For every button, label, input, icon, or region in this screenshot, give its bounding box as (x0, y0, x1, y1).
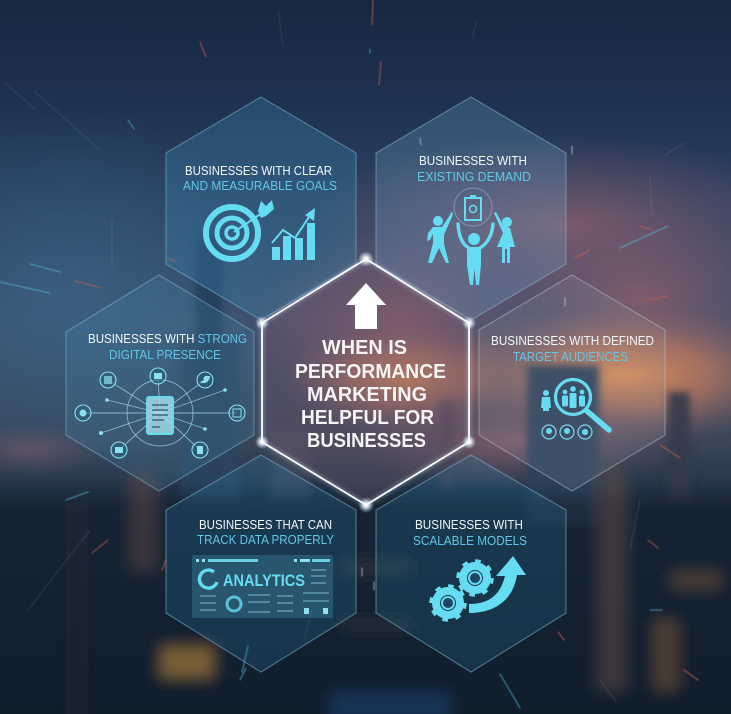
label: track data properly (197, 518, 335, 547)
icon: white up arrow (346, 283, 386, 329)
panel: existing demand (376, 97, 566, 320)
label: existing demand: EXISTING DEMAND (417, 170, 531, 184)
icon: audience circles (542, 425, 592, 439)
icon: tablet (147, 397, 173, 434)
icon: target with arrow (206, 200, 274, 259)
title: HELPFUL FOR (301, 407, 435, 429)
label: scalable models: SCALABLE MODELS (413, 534, 527, 548)
icon: social nodes (75, 368, 245, 458)
label: strong digital presence (88, 332, 247, 362)
icon: person outside magnifier (541, 390, 551, 411)
icon: connected network lines (83, 376, 237, 450)
chart: analytics dashboard (192, 555, 333, 618)
panel: track data properly (166, 455, 356, 672)
label: strong digital presence: DIGITAL PRESENCE (109, 348, 221, 362)
dashboard title: ANALYTICS (223, 571, 305, 590)
label: existing demand: BUSINESSES WITH (419, 154, 527, 168)
label: clear and measurable goals (183, 164, 337, 193)
title (295, 337, 446, 452)
icon: center person arms raised (458, 224, 493, 285)
glowing vertices (255, 251, 476, 513)
label: strong digital presence: BUSINESSES WITH STRONG (88, 332, 247, 346)
title: MARKETING (307, 384, 427, 406)
panel: scalable models (376, 455, 566, 672)
icon: upper gear (458, 562, 492, 594)
icon: left person cheering (427, 212, 453, 263)
icon: lower gear (432, 586, 464, 620)
icon: clipboard in circle (454, 188, 492, 226)
icon: rising bar chart (272, 208, 315, 260)
icon: social node glyphs (80, 373, 241, 454)
title: PERFORMANCE (295, 361, 446, 383)
lower city blocks (0, 470, 731, 714)
panel: clear and measurable goals (166, 97, 356, 320)
label: clear and measurable goals: BUSINESSES WITH CLEAR (185, 164, 332, 178)
label: scalable models (413, 518, 527, 548)
label: track data properly: BUSINESSES THAT CAN (199, 518, 332, 532)
label: clear and measurable goals: AND MEASURABLE GOALS (183, 179, 337, 193)
icon: right person in dress (494, 212, 515, 263)
label: existing demand (417, 154, 531, 184)
label: defined target audiences: BUSINESSES WITH DEFINED (491, 334, 654, 348)
icon: magnifier over people (556, 380, 609, 430)
icon: upward curved arrow (469, 556, 526, 613)
panel: defined target audiences (479, 275, 665, 491)
title: WHEN IS (322, 337, 407, 359)
label: track data properly: TRACK DATA PROPERLY (197, 533, 335, 547)
panel: central hexagon (255, 251, 476, 513)
label: scalable models: BUSINESSES WITH (415, 518, 523, 532)
panel: strong digital presence (66, 275, 254, 491)
title: BUSINESSES (307, 430, 426, 452)
label: defined target audiences (491, 334, 654, 364)
label: defined target audiences: TARGET AUDIENCES (513, 350, 628, 364)
